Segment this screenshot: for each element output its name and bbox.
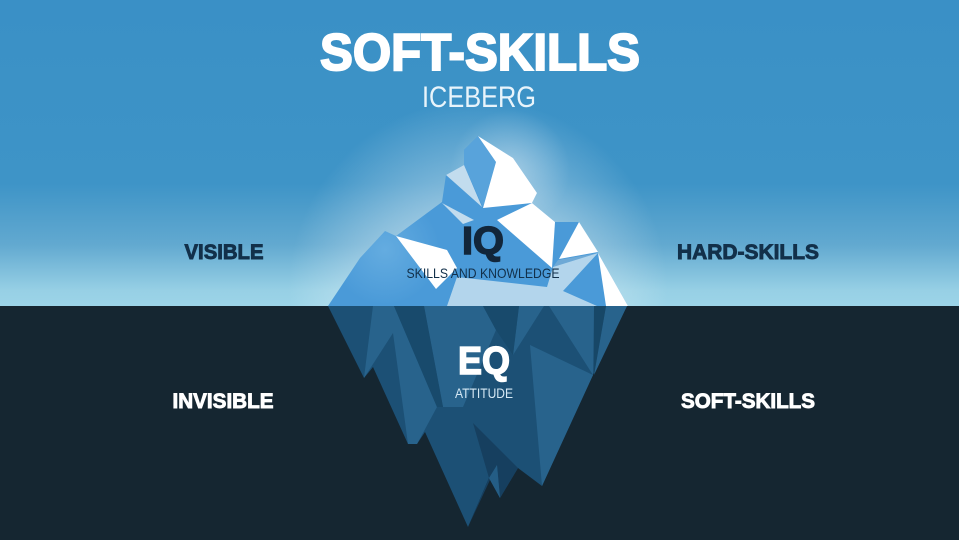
subtitle: ICEBERG	[422, 81, 536, 114]
label: hard-skills: HARD-SKILLS	[677, 241, 819, 264]
label: soft-skills: SOFT-SKILLS	[681, 390, 815, 413]
label: invisible: INVISIBLE	[172, 390, 274, 413]
iceberg above water	[328, 136, 628, 306]
EQ caption: ATTITUDE	[455, 385, 513, 401]
iceberg below water	[328, 306, 627, 527]
IQ heading: IQ	[462, 220, 504, 263]
title: SOFT-SKILLS	[320, 24, 640, 82]
IQ caption: SKILLS AND KNOWLEDGE	[406, 265, 560, 281]
glow behind iceberg	[280, 95, 676, 306]
EQ heading: EQ	[458, 340, 510, 383]
sky background	[0, 0, 959, 306]
sea background	[0, 306, 959, 540]
label: visible: VISIBLE	[184, 241, 264, 264]
